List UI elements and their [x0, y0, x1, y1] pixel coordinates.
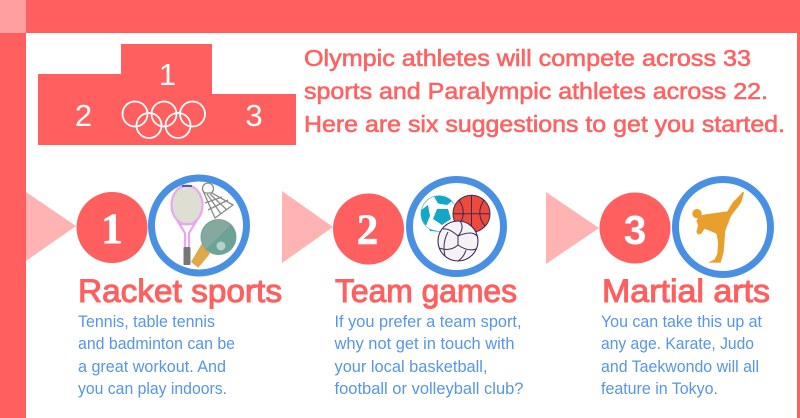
icon: basketball	[453, 195, 490, 232]
arrow 2	[282, 191, 333, 263]
number badge 1	[76, 192, 148, 263]
icon: shuttlecock	[202, 183, 233, 218]
number badge 3	[600, 192, 670, 264]
section text: team games	[333, 313, 524, 398]
section text: racket sports: a great workout. And	[78, 358, 226, 376]
number badge 3: 3	[624, 207, 646, 253]
section text: team games: football or volleyball club?	[334, 380, 524, 398]
number badge 2: 2	[357, 207, 378, 254]
section text: racket sports: you can play indoors.	[78, 380, 227, 398]
intro text: sports and Paralympic athletes across 22.	[304, 78, 768, 104]
icon: volleyball	[438, 221, 478, 261]
banner corner square	[0, 0, 26, 33]
icon: olympic rings	[122, 102, 205, 138]
number badge 1: 1	[101, 206, 123, 253]
section text: martial arts: feature in Tokyo.	[601, 380, 718, 398]
intro text: Olympic athletes will compete across 33	[304, 45, 751, 71]
arrow 1	[26, 192, 76, 261]
section text: martial arts	[601, 313, 762, 398]
section text: team games: If you prefer a team sport,	[334, 313, 522, 331]
section text: martial arts: and Taekwondo will all	[601, 358, 759, 376]
icon: team games	[410, 180, 504, 274]
intro text	[304, 45, 785, 137]
icon: martial arts	[676, 180, 770, 274]
icon: table tennis bat	[191, 219, 236, 268]
podium with olympic rings	[38, 44, 296, 145]
right border	[797, 33, 800, 418]
top banner	[0, 0, 800, 33]
section text: martial arts: any age. Karate, Judo	[601, 335, 754, 353]
number badge 2	[333, 194, 404, 264]
section heading: racket sports: Racket sports	[78, 273, 282, 309]
section text: racket sports: Tennis, table tennis	[78, 313, 215, 331]
arrow 3	[546, 192, 599, 264]
icon: racket sports	[152, 178, 246, 273]
icon: kicking figure	[692, 191, 744, 263]
section heading: team games: Team games	[335, 273, 517, 309]
section heading: martial arts: Martial arts	[602, 273, 770, 309]
section text: team games: your local basketball,	[334, 358, 488, 376]
podium with olympic rings: 3	[245, 98, 263, 133]
podium with olympic rings: 1	[159, 57, 176, 92]
icon: tennis racket	[172, 186, 202, 265]
section text: racket sports: and badminton can be	[78, 335, 235, 353]
section text: martial arts: You can take this up at	[601, 313, 762, 331]
left border	[0, 33, 26, 418]
intro text: Here are six suggestions to get you started.	[304, 111, 785, 137]
section text: racket sports	[78, 313, 235, 398]
icon: football	[421, 196, 457, 232]
podium with olympic rings: 2	[75, 98, 92, 133]
section text: team games: why not get in touch with	[333, 335, 514, 353]
